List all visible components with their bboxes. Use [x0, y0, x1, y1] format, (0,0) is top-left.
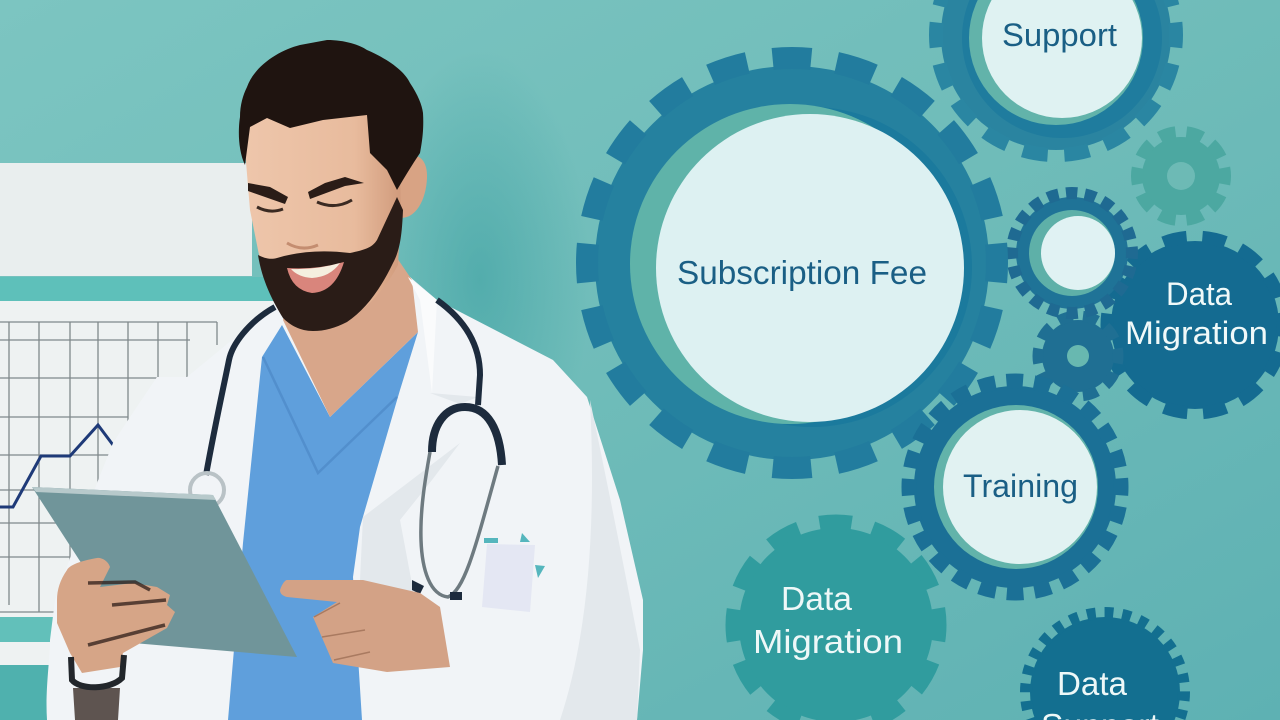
gear: tiny dark [1038, 316, 1118, 396]
mouth [287, 262, 344, 293]
stethoscope yoke [432, 407, 502, 465]
label: Data Support: Data [1057, 665, 1128, 702]
holding hand [57, 558, 175, 673]
coat collar right [408, 277, 437, 393]
pointing hand [280, 580, 450, 672]
gear: Support [936, 0, 1176, 155]
nose shadow [287, 243, 318, 248]
figure: doctor with tablet [32, 40, 643, 720]
blue scrubs [228, 325, 418, 720]
gear: Data Migration teal [733, 522, 939, 720]
tablet edge [32, 487, 216, 500]
tablet [32, 487, 297, 657]
stethoscope ear tips [412, 580, 462, 600]
chart grid [0, 322, 217, 612]
finger gap [314, 603, 370, 660]
teal band [0, 277, 285, 301]
label: Subscription Fee: Subscription Fee [677, 254, 927, 291]
stethoscope grey tubing [421, 452, 498, 597]
label: Support: Support [1002, 17, 1117, 53]
face [245, 100, 402, 330]
gear: Data Support [1026, 613, 1184, 720]
label: Data Migration: Data [1166, 276, 1232, 312]
scrubs V seam [263, 357, 397, 473]
lower teal band [0, 617, 58, 642]
label: Data Migration: Data [781, 580, 853, 617]
beard [258, 197, 403, 331]
chart panel [0, 301, 280, 665]
gear: Subscription Fee [587, 58, 997, 468]
panel: wall chart board [0, 163, 285, 665]
stethoscope chest piece [190, 473, 224, 507]
ear [400, 156, 427, 218]
eyes [257, 200, 352, 211]
hair [239, 40, 423, 190]
chart line [0, 425, 113, 507]
neck [283, 255, 418, 417]
eyebrows [248, 177, 364, 204]
gear: pale green small [1137, 132, 1225, 220]
pocket pen accents [484, 533, 545, 578]
finger shadows [88, 582, 166, 645]
blank white header panel [0, 163, 252, 276]
pocket [482, 544, 535, 612]
wristband [71, 655, 124, 687]
label: Data Migration: Migration [1125, 315, 1268, 351]
label: Data Migration: Migration [753, 623, 903, 660]
white coat [47, 277, 643, 720]
gear: Data Migration dark [1107, 237, 1280, 413]
teeth [291, 263, 340, 278]
gear: Training [909, 381, 1121, 593]
label: Training: Training [963, 468, 1078, 504]
coat fold shading [360, 393, 640, 720]
stethoscope tubes [206, 300, 480, 475]
forearm [73, 688, 120, 720]
gear: unlabelled small [1012, 193, 1132, 313]
